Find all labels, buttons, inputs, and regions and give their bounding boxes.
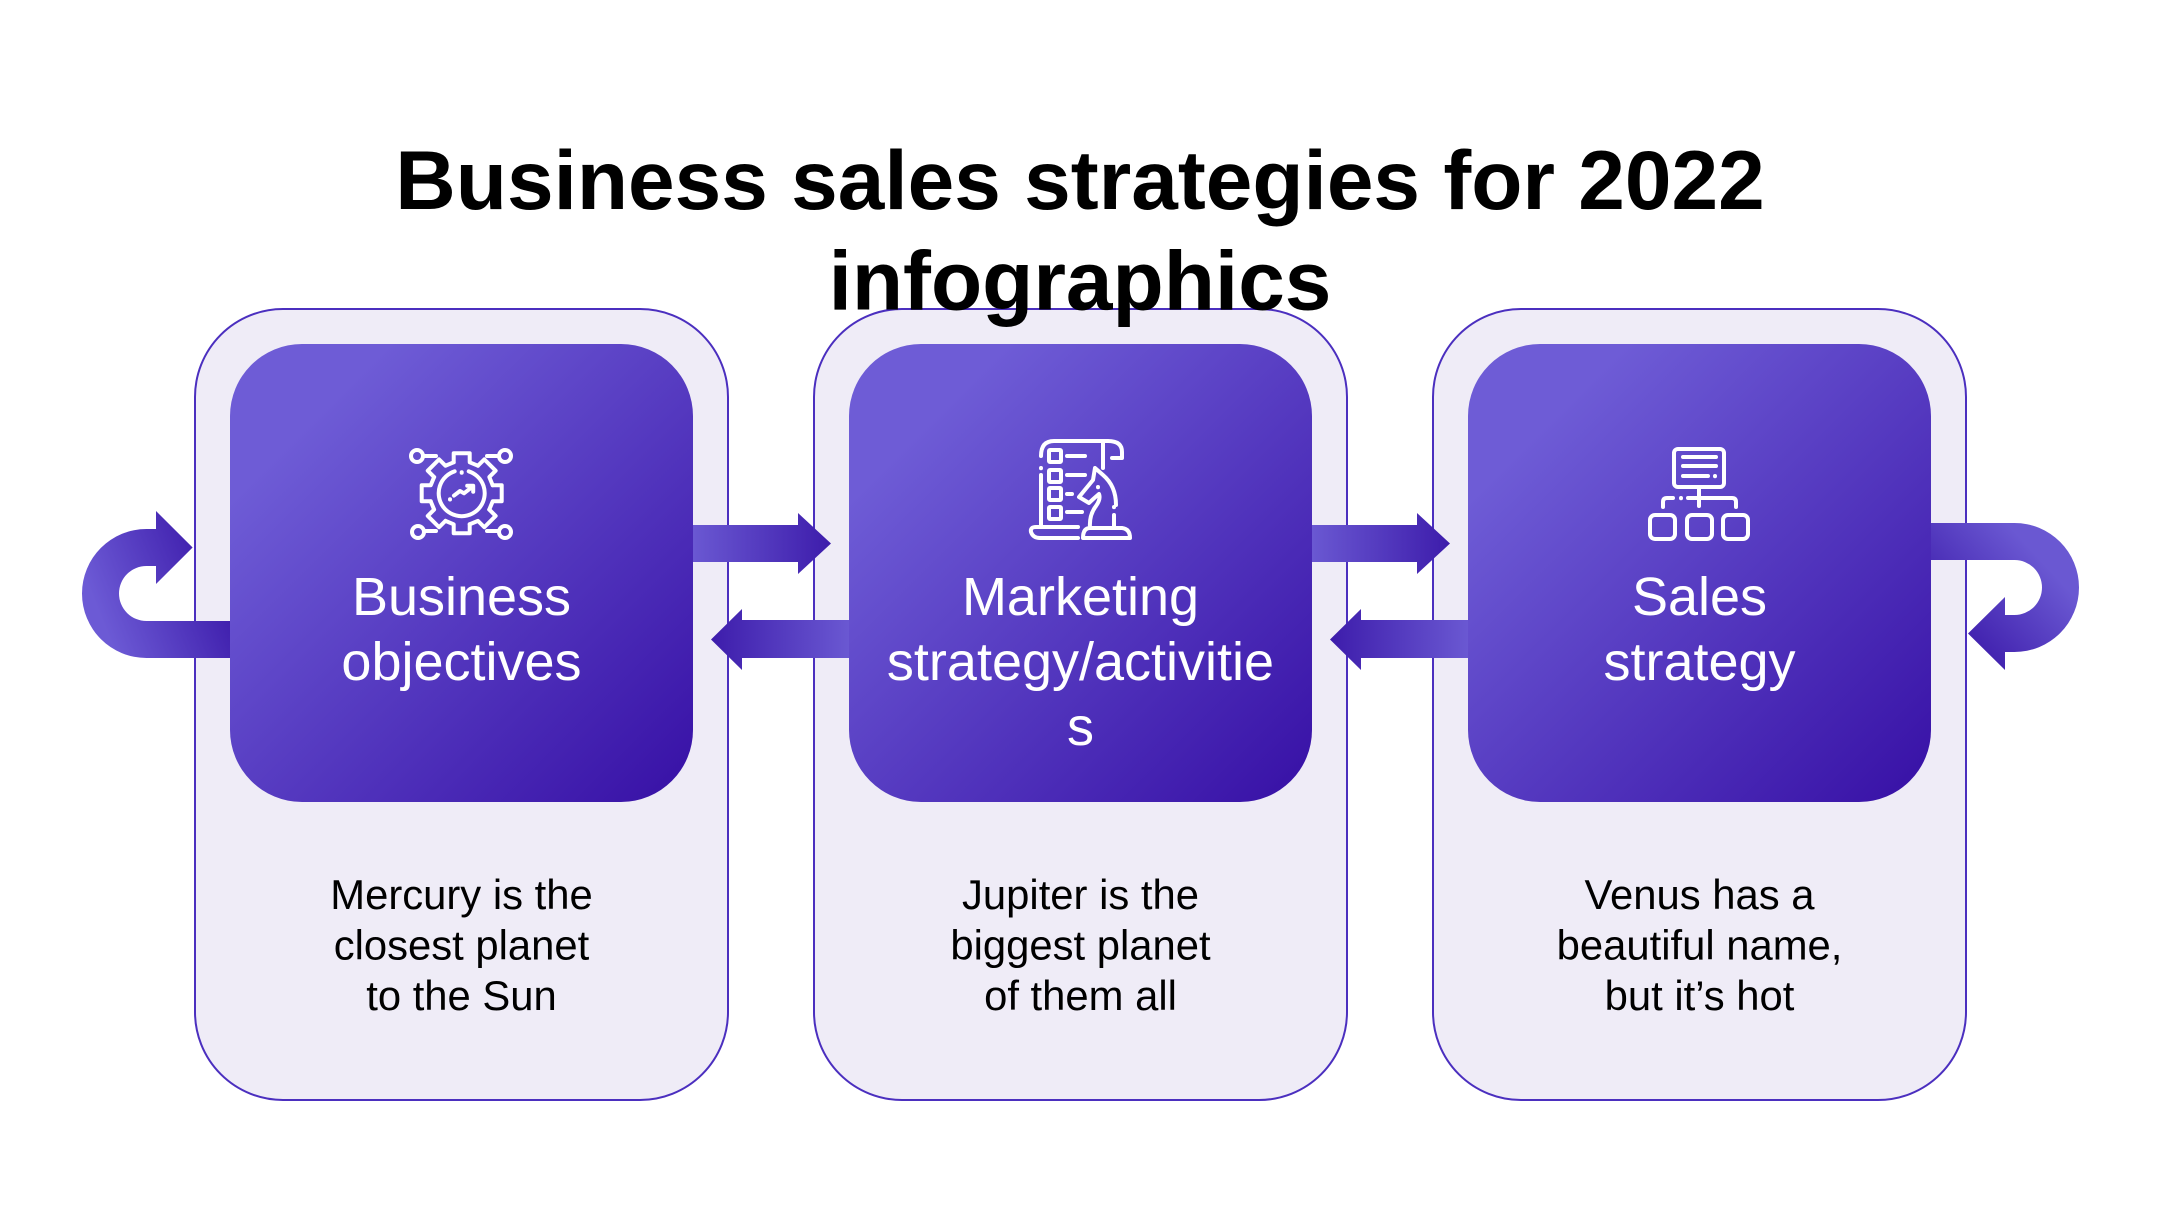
text block: Mercury: Mercury is the xyxy=(330,871,593,918)
icon: checklist with chess knight xyxy=(1031,441,1130,538)
arrow: marketing to business xyxy=(711,609,849,670)
arrow: sales to marketing xyxy=(1330,609,1468,670)
arrow: marketing to sales xyxy=(1312,513,1450,574)
title: Business sales strategies for 2022 xyxy=(395,133,1765,227)
text block: Jupiter: of them all xyxy=(984,972,1177,1019)
text block: Jupiter: Jupiter is the xyxy=(962,871,1199,918)
card: sales strategy xyxy=(1468,344,1931,802)
arrow: business to marketing xyxy=(693,513,831,574)
title: infographics xyxy=(829,234,1331,328)
panel: sales strategy background xyxy=(1433,309,1966,1100)
card title: strategy/activitie xyxy=(887,632,1274,692)
panel: business objectives background xyxy=(195,309,728,1100)
icon: gear with growth chart xyxy=(411,450,511,538)
card title: Marketing xyxy=(962,567,1199,627)
card: marketing strategy xyxy=(849,344,1312,802)
icon: org structure with document xyxy=(1650,449,1748,539)
arrow: loop back into sales strategy xyxy=(1931,523,2079,670)
text block: Venus: Venus has a xyxy=(1584,871,1815,918)
card title: strategy xyxy=(1603,632,1796,692)
text block: Venus: beautiful name, xyxy=(1557,922,1842,968)
card: business objectives xyxy=(230,344,693,802)
card title: objectives xyxy=(341,632,582,692)
card title: Business xyxy=(352,567,571,627)
text block: Venus: but it’s hot xyxy=(1605,972,1795,1019)
text block: Jupiter: biggest planet xyxy=(950,922,1211,968)
text block: Mercury: to the Sun xyxy=(366,972,557,1019)
card title: Sales xyxy=(1632,567,1767,627)
panel: marketing strategy background xyxy=(814,309,1347,1100)
text block: Mercury: closest planet xyxy=(334,922,590,968)
card title: s xyxy=(1067,697,1094,757)
arrow: loop back into business objectives xyxy=(82,511,230,658)
